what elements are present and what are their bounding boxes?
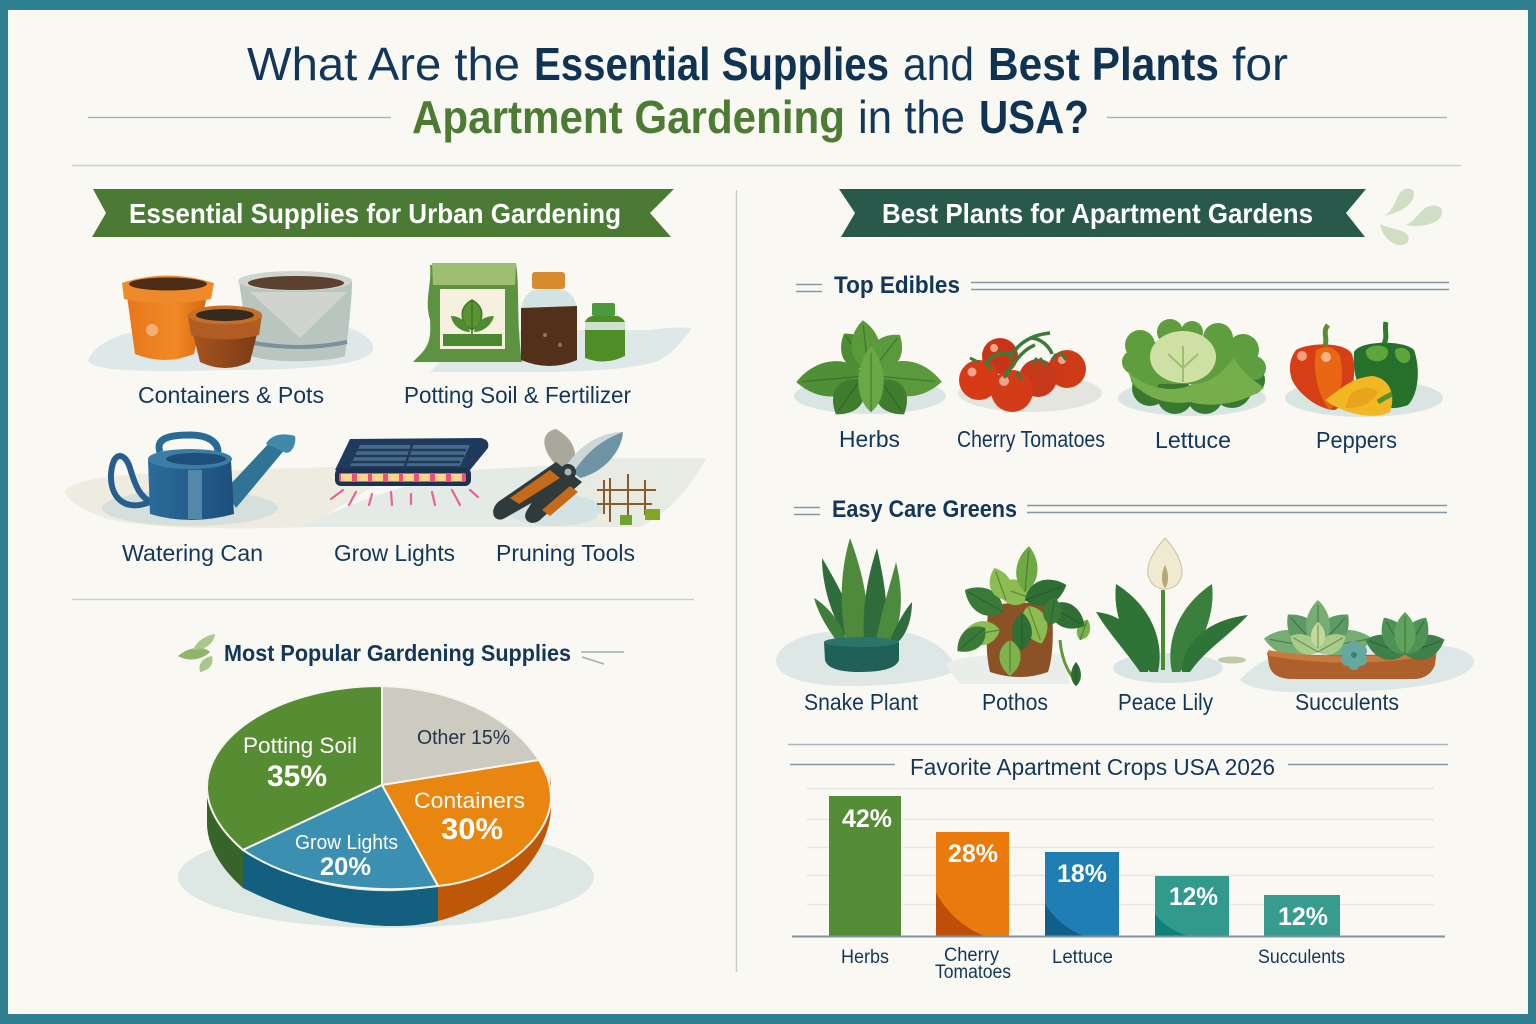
illustration: cherry tomatoes [958,333,1102,412]
pie labels: Potting Soil [243,733,357,758]
banner: essential supplies [92,189,674,237]
banner: essential supplies: Essential Supplies for Urban Gardening [129,198,621,229]
title: Best Plants [988,38,1219,90]
heading: favorite crops: Favorite Apartment Crops USA 2026 [910,754,1275,780]
title: USA? [979,91,1089,143]
pie labels: 20% [320,853,371,881]
banner: best plants: Best Plants for Apartment Gardens [882,198,1313,229]
bar: cherry tomatoes: 28% [948,840,998,868]
pie labels: Grow Lights [295,832,398,854]
label: herbs: Herbs [839,426,900,452]
illustration: pruning tools [493,429,706,527]
bar: cherry tomatoes [936,832,1009,936]
green bottle [585,303,625,362]
bar chart: favorite crops [792,788,1445,983]
pie labels: Other 15% [417,727,510,749]
illustration: succulents [1218,600,1449,679]
axis labels: Lettuce [1052,947,1113,968]
label: snake plant: Snake Plant [804,689,919,715]
bar: peppers: 12% [1169,883,1218,911]
illustration: shadows under easy care greens [776,630,1474,692]
heading: top edibles [796,272,1449,299]
title: Essential Supplies [534,38,889,90]
title: in the [858,91,965,143]
heading: most popular supplies [178,634,624,672]
grey fabric pot [238,271,352,361]
label: pothos: Pothos [982,689,1048,715]
bar: herbs [829,796,901,936]
fertilizer bottle [521,272,577,366]
orange pot [122,276,214,360]
label: lettuce: Lettuce [1155,427,1231,453]
icon: pale leaves [1380,189,1442,245]
label: grow lights: Grow Lights [334,540,455,566]
yellow pepper [1325,376,1392,416]
heading: easy care greens: Easy Care Greens [832,496,1017,523]
slice: containers [382,760,551,886]
label: peace lily: Peace Lily [1118,689,1213,715]
title: Apartment Gardening [412,91,845,143]
rosette left [1262,600,1374,661]
bar: peppers [1155,876,1229,936]
slice: potting soil [207,686,382,850]
title: What Are the [247,38,520,90]
bar: succulents: 12% [1278,903,1328,931]
title: for [1232,38,1288,90]
axis labels: Succulents [1258,947,1345,968]
banner: best plants [839,189,1366,237]
illustration: potting soil and fertilizer [413,263,692,372]
illustration: snake plant [814,538,912,672]
green pepper [1354,322,1418,408]
label: containers: Containers & Pots [138,382,324,408]
illustration: pothos [951,545,1093,686]
label: watering can: Watering Can [122,540,263,566]
axis labels: Cherry [944,945,999,966]
label: cherry tomatoes: Cherry Tomatoes [957,426,1105,452]
label: potting soil: Potting Soil & Fertilizer [404,382,631,408]
teal flower [1341,641,1367,670]
illustration: herbs [794,319,946,423]
heading: most popular supplies: Most Popular Gardening Supplies [224,640,571,666]
heading: easy care greens [794,496,1447,523]
title [247,38,1288,143]
pie chart: most popular supplies [178,686,594,928]
rosette right [1361,612,1449,665]
illustration: containers and pots [88,271,373,371]
axis labels: Tomatoes [935,962,1011,983]
title: and [903,38,974,90]
pie shadow [178,826,594,928]
illustration: grow lights [303,438,705,527]
planter [1267,648,1437,679]
bar: succulents [1264,895,1340,936]
bar: herbs: 42% [842,805,892,833]
red pepper [1290,325,1354,410]
bar: lettuce [1045,852,1119,936]
label: peppers: Peppers [1316,427,1397,453]
heading: top edibles: Top Edibles [834,272,960,299]
axis labels: Herbs [841,947,889,968]
illustration: peppers [1285,322,1443,417]
illustration: watering can [65,434,420,528]
pie labels: 30% [441,813,503,846]
soil bag [413,263,522,362]
illustration: lettuce [1118,319,1266,416]
pie labels [243,727,525,881]
pie labels: Containers [414,788,525,813]
slice: grow lights [243,785,438,889]
label: pruning tools: Pruning Tools [496,540,635,566]
illustration: peace lily [1096,538,1248,672]
label: succulents: Succulents [1295,689,1399,715]
small terracotta pot [188,306,262,368]
slice: other [382,686,539,785]
bar: lettuce: 18% [1057,860,1107,888]
pie side walls [207,772,551,926]
pie labels: 35% [267,760,327,793]
axis labels [841,945,1345,983]
